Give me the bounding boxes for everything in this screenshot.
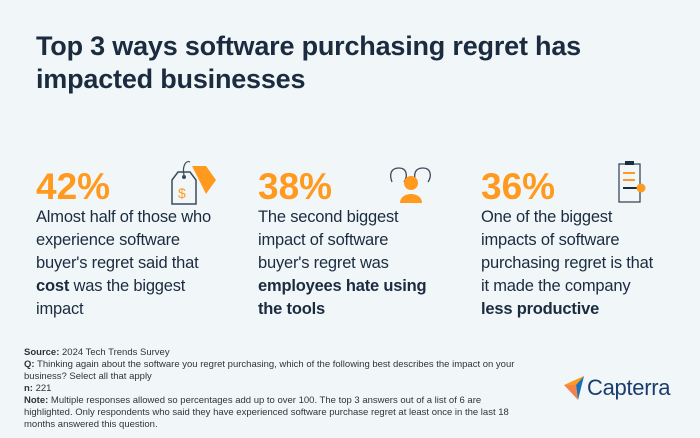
logo: Capterra: Capterra [587,375,670,400]
text: cost was the biggest [36,277,185,295]
percentage 42: 42% [36,166,110,207]
text: employees hate using [258,277,426,295]
text: The second biggest [258,208,398,226]
text: purchasing regret is that [481,254,653,272]
panel: employees [258,166,431,318]
text: buyer's regret was [258,254,389,272]
panel: productivity [481,161,654,318]
icon: price tag: $ [178,185,186,201]
percentage 38: 38% [258,166,332,207]
footer notes: Note: Multiple responses allowed so percentages add up to over 100. The top 3 answers out of a list of 6 are [24,395,481,406]
text: impact of software [258,231,388,249]
text: less productive [481,300,599,318]
panel: cost [36,161,216,318]
text: experience software [36,231,180,249]
footer notes: highlighted. Only respondents who said they have experienced software purchase regret at least once in the last 18 [24,407,509,418]
percentage 36: 36% [481,166,555,207]
footer notes: Source: 2024 Tech Trends Survey [24,347,170,358]
text: it made the company [481,277,630,295]
text [258,208,426,318]
icon: people [390,167,431,203]
text [36,208,211,318]
footer notes: months answered this question. [24,419,158,430]
text [481,208,654,318]
footer notes: business? Select all that apply [24,371,152,382]
icon: clipboard [618,161,646,203]
text: impact [36,300,83,318]
footer notes [24,347,514,430]
text: Almost half of those who [36,208,211,226]
icon: price tag [171,161,216,205]
text: buyer's regret said that [36,254,199,272]
footer notes: Q: Thinking again about the software you regret purchasing, which of the following best describes the impact on your [24,359,514,370]
text: impacts of software [481,231,619,249]
text: One of the biggest [481,208,612,226]
text: the tools [258,300,325,318]
title: Top 3 ways software purchasing regret has impacted businesses [36,31,581,94]
footer notes: n: 221 [24,383,51,394]
